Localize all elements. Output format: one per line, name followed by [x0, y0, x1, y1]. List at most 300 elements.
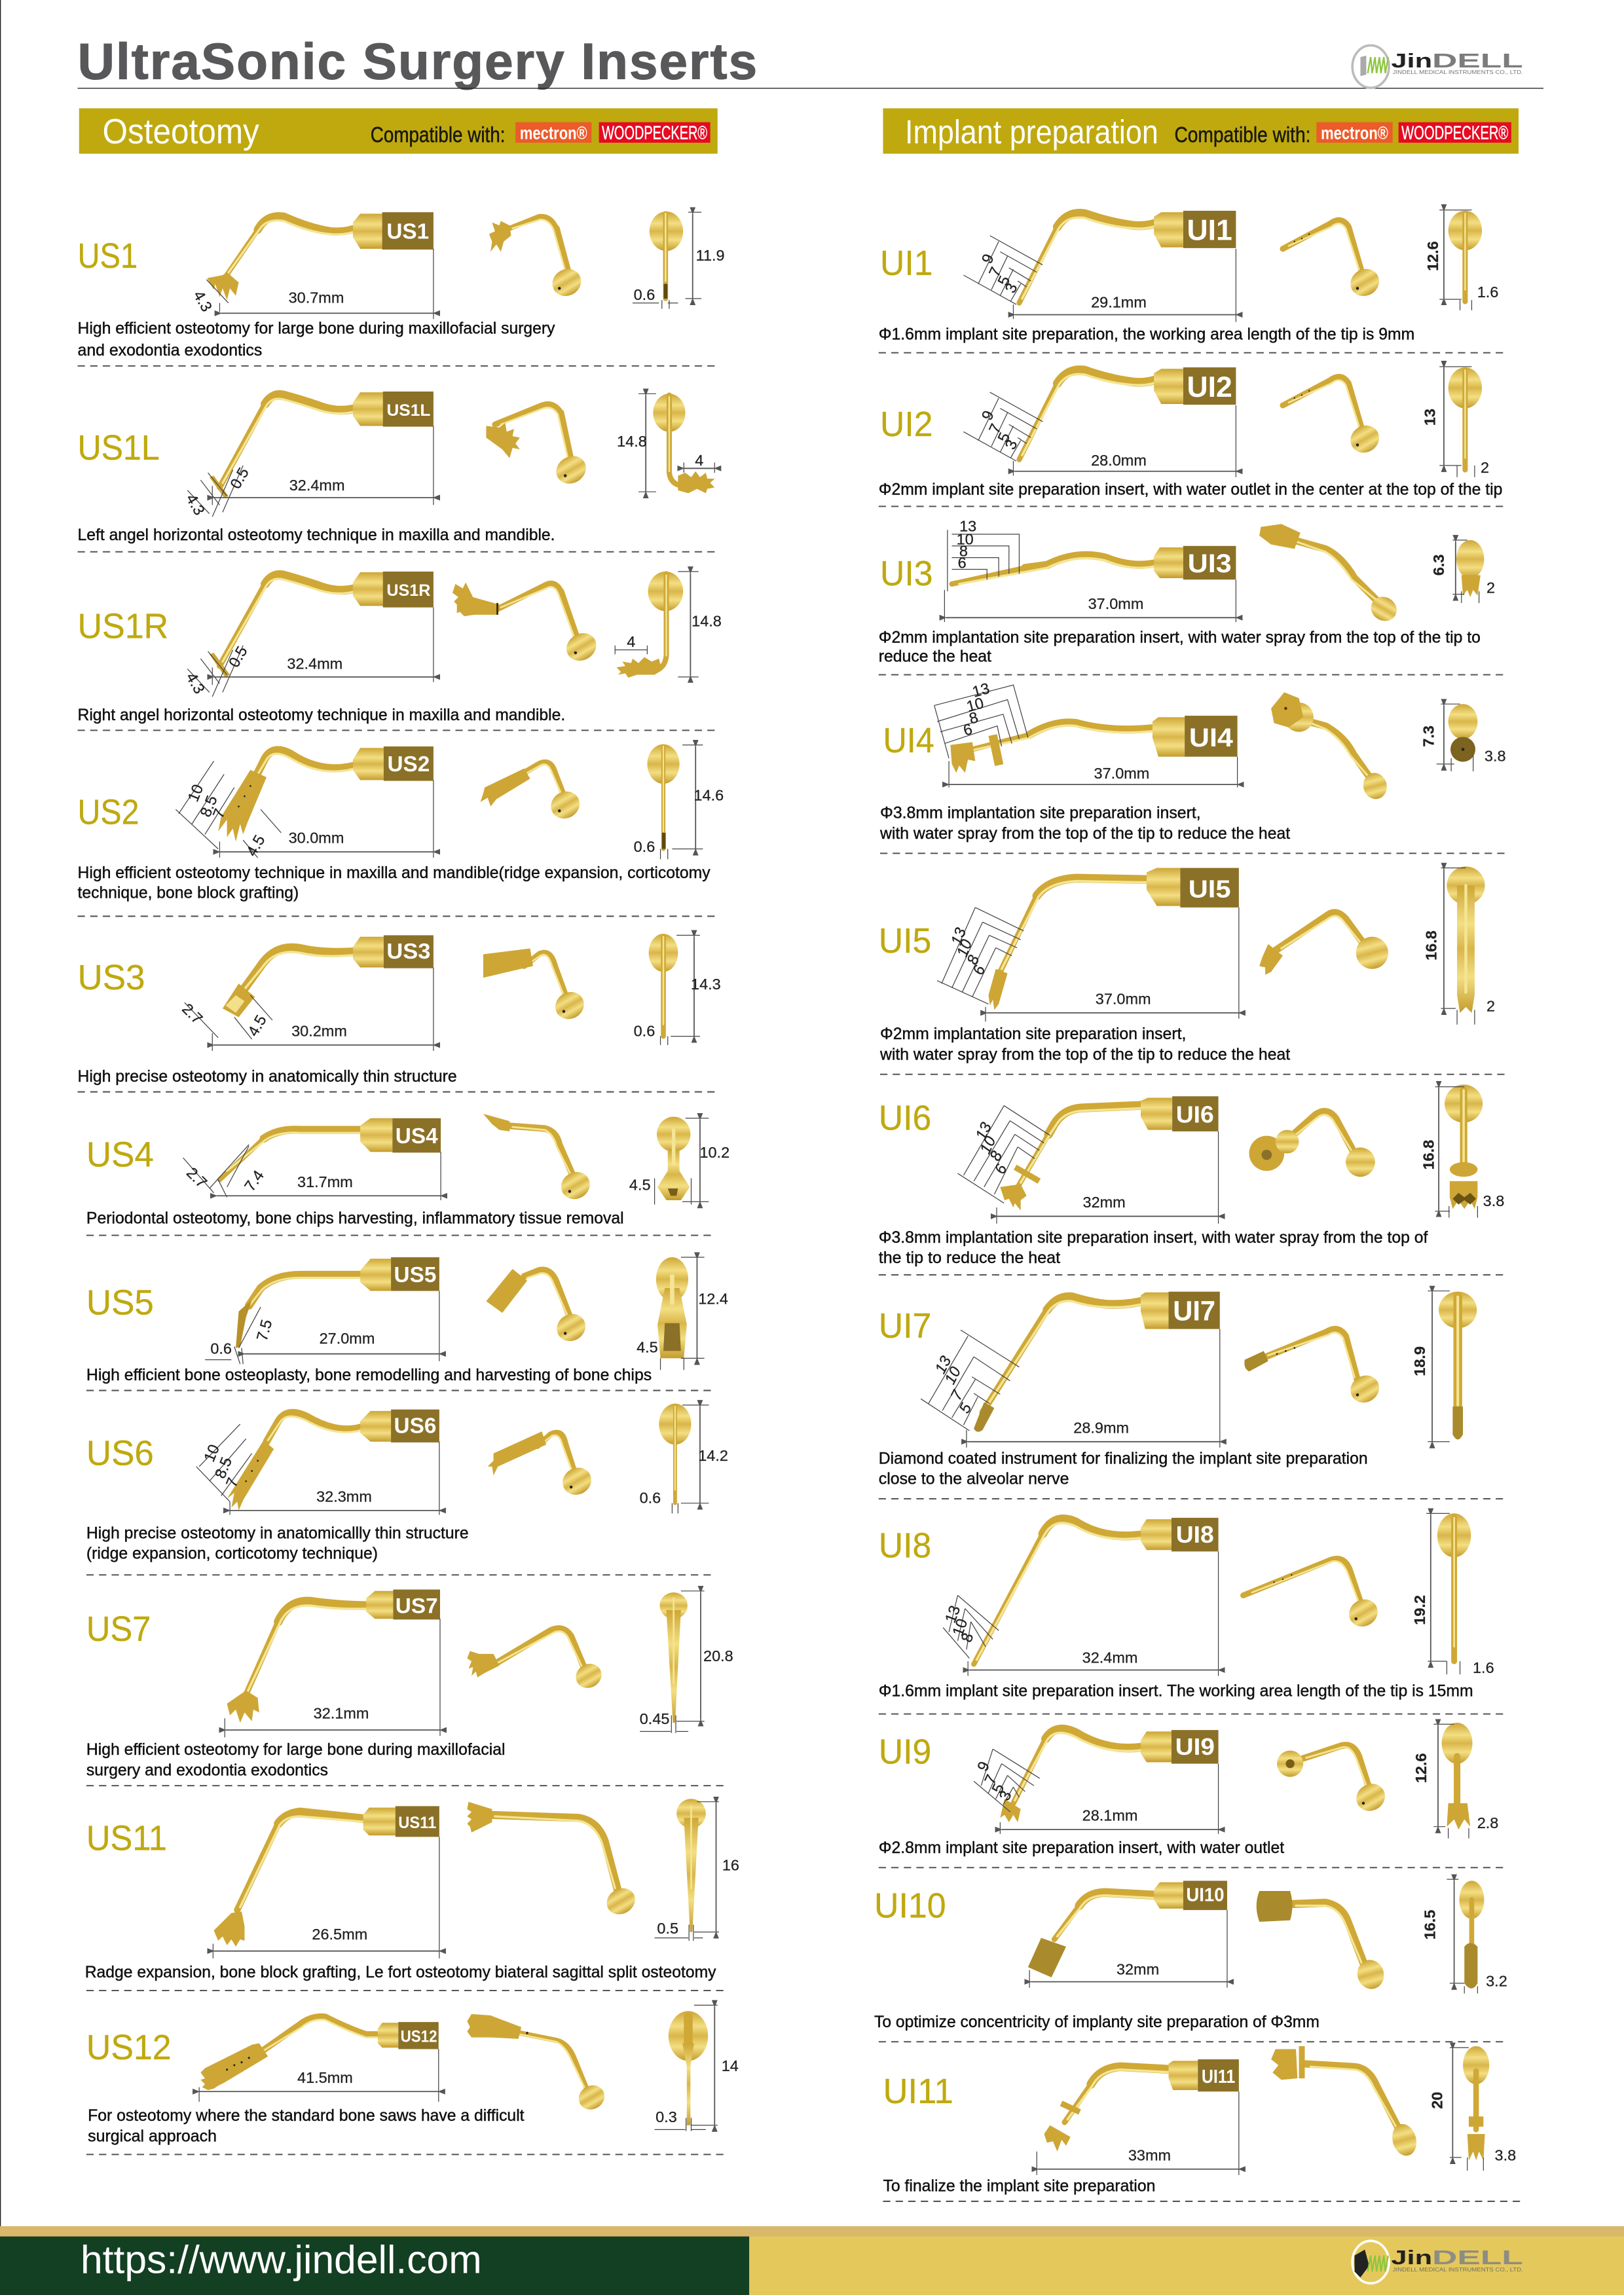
front view: 0.3	[655, 2108, 677, 2125]
dimensions: 8	[967, 708, 980, 727]
description: For osteotomy where the standard bone saws have a difficult	[88, 2107, 525, 2125]
dimensions	[190, 249, 434, 319]
description: the tip to reduce the heat	[879, 1249, 1060, 1267]
front view: 3.8	[1485, 747, 1506, 764]
insert with label	[1028, 1881, 1227, 1977]
front view	[633, 211, 725, 309]
dimensions: 8	[963, 953, 982, 967]
logo: Jindell top: Jin	[1391, 50, 1432, 72]
front view	[634, 744, 724, 859]
dimensions: 32.4mm	[289, 477, 345, 494]
front view: 1.6	[1477, 284, 1498, 301]
insert with label: UI8	[1176, 1522, 1214, 1548]
front view	[634, 934, 721, 1045]
dimensions: 10	[941, 1364, 964, 1387]
dimensions: 13	[948, 925, 969, 947]
name: US1R	[78, 607, 168, 646]
insert with label: US11	[398, 1814, 436, 1832]
header	[78, 33, 1543, 90]
name: US7	[86, 1609, 151, 1649]
entry: UI9	[879, 1723, 1498, 1857]
footer: website panel: https://www.jindell.com	[81, 2237, 482, 2281]
description: Φ2.8mm implant site preparation insert, with water outlet	[879, 1839, 1284, 1857]
dimensions: 10	[976, 1133, 999, 1156]
front view	[1423, 866, 1495, 1025]
dimensions: 28.1mm	[1082, 1807, 1137, 1824]
logo: Jindell footer: Jin	[1391, 2247, 1432, 2269]
insert with label	[974, 1292, 1220, 1432]
front view	[640, 1404, 728, 1513]
description: Right angel horizontal osteotomy technique in maxilla and mandible.	[78, 707, 565, 724]
side view	[467, 1802, 640, 1919]
front view: 18.9	[1411, 1346, 1428, 1376]
insert with label: US2	[387, 752, 430, 777]
name: UI5	[879, 921, 931, 961]
entry: US11	[85, 1799, 739, 1981]
front view: 2	[1486, 579, 1495, 596]
front view: 3.2	[1486, 1972, 1507, 1989]
dimensions: 0.6	[210, 1340, 232, 1357]
dimensions: 7	[223, 1475, 242, 1490]
description: Left angel horizontal osteotomy technique in maxilla and mandible.	[78, 526, 555, 544]
description: Φ2mm implant site preparation insert, with water outlet in the center at the top of the tip	[879, 481, 1502, 499]
description: Φ1.6mm implant site preparation, the working area length of the tip is 9mm	[879, 326, 1414, 344]
front view: 2	[1481, 459, 1489, 476]
description: surgery and exodontia exodontics	[86, 1761, 328, 1779]
insert with label	[1000, 1096, 1219, 1211]
description: surgical approach	[88, 2127, 217, 2145]
dimensions: 32mm	[1083, 1194, 1126, 1211]
insert with label	[218, 746, 434, 841]
section band: Osteotomy: WOODPECKER®	[602, 122, 707, 143]
side view	[483, 948, 589, 1024]
insert with label: US3	[386, 940, 430, 964]
name: US4	[86, 1135, 154, 1175]
dimensions: 4.5	[243, 832, 268, 859]
description: High efficient osteotomy technique in maxilla and mandible(ridge expansion, corticotomy	[78, 864, 710, 882]
front view: 14.2	[698, 1447, 728, 1464]
dimensions: 5	[994, 273, 1013, 288]
insert with label: UI6	[1176, 1102, 1214, 1128]
insert with label: UI3	[1188, 549, 1232, 578]
entry: UI4	[879, 680, 1506, 843]
front view: 0.6	[634, 1023, 655, 1040]
description: technique, bone block grafting)	[78, 884, 299, 902]
dimensions: 3	[1002, 437, 1021, 452]
name: UI11	[883, 2072, 953, 2111]
dimensions: 32.3mm	[316, 1488, 372, 1505]
entry: US2	[78, 744, 724, 902]
front view: 1.6	[1473, 1659, 1494, 1676]
insert with label	[207, 212, 434, 300]
dimensions: 31.7mm	[297, 1173, 353, 1190]
logo: Jindell top: DELL	[1432, 50, 1523, 72]
insert with label: US1R	[386, 582, 431, 600]
front view	[1420, 1084, 1504, 1218]
dimensions	[937, 908, 1239, 1021]
front view: 14.6	[693, 787, 724, 804]
name: UI8	[879, 1526, 931, 1565]
insert with label: UI2	[1187, 371, 1232, 403]
description: Φ2mm implantation site preparation insert,	[880, 1025, 1186, 1043]
dimensions: 32mm	[1116, 1960, 1159, 1977]
front view: 12.4	[698, 1291, 728, 1308]
front view: 4	[695, 452, 703, 469]
front view: 14.8	[617, 433, 647, 450]
insert with label	[227, 1410, 439, 1511]
entry: UI8	[879, 1513, 1494, 1700]
side view	[1259, 913, 1392, 975]
front view: 12.6	[1412, 1753, 1430, 1783]
description: High efficient osteotomy for large bone during maxillofacial	[86, 1741, 506, 1759]
description: reduce the heat	[879, 648, 991, 665]
front view: 2	[1486, 998, 1495, 1015]
insert with label	[1019, 211, 1236, 303]
insert with label	[950, 716, 1238, 773]
side view	[1259, 524, 1401, 625]
dimensions: 10	[957, 531, 974, 548]
dimensions: 8	[959, 542, 968, 559]
front view: 16	[722, 1857, 739, 1874]
entry: UI3	[879, 517, 1495, 665]
front view: 14.3	[691, 976, 721, 993]
front view: 16.8	[1423, 930, 1440, 961]
description: High precise osteotomy in anatomically thin structure	[78, 1068, 457, 1086]
dimensions: 37.0mm	[1096, 990, 1151, 1007]
entry: US5	[86, 1257, 728, 1384]
section band: Implant preparation: Compatible with:	[1174, 123, 1310, 147]
dimensions	[944, 517, 1236, 622]
logo: Jindell footer	[1352, 2241, 1523, 2283]
insert with label: US12	[401, 2028, 437, 2046]
dimensions: 6	[969, 963, 989, 977]
front view	[1411, 1513, 1494, 1676]
dimensions: 10	[949, 1617, 970, 1638]
section band: Osteotomy	[79, 108, 718, 154]
insert with label	[200, 2017, 439, 2090]
front view: 16.8	[1420, 1140, 1437, 1170]
front view: 20	[1429, 2092, 1446, 2109]
section band: Implant preparation: Implant preparation	[905, 113, 1158, 151]
insert with label	[227, 1590, 440, 1723]
name: US2	[78, 793, 139, 832]
dimensions	[963, 236, 1236, 322]
front view	[1422, 1879, 1507, 1994]
description: and exodontia exodontics	[78, 342, 262, 359]
dimensions	[213, 1837, 439, 1958]
dimensions: 28.0mm	[1091, 452, 1147, 469]
dimensions	[225, 1619, 440, 1737]
dimensions: 0.5	[227, 465, 252, 492]
side view	[467, 1628, 606, 1693]
dimensions: 37.0mm	[1088, 595, 1143, 612]
entry: US4	[86, 1114, 729, 1228]
dimensions: 6	[991, 1161, 1010, 1177]
entry: US6	[86, 1404, 728, 1563]
entry: UI10	[874, 1879, 1507, 2031]
front view: 0.6	[640, 1490, 661, 1507]
name: US1L	[78, 428, 160, 468]
front view: 16.5	[1422, 1910, 1439, 1939]
dimensions	[205, 1291, 439, 1364]
dimensions: 2.7	[179, 1000, 206, 1027]
dimensions	[1037, 2091, 1239, 2175]
dimensions: 10	[953, 937, 975, 959]
dimensions: 33mm	[1128, 2146, 1171, 2163]
name: UI7	[879, 1306, 931, 1346]
insert with label	[213, 1806, 439, 1947]
entry: US3	[78, 934, 721, 1086]
dimensions	[199, 2049, 439, 2102]
dimensions: 6	[961, 720, 974, 739]
dimensions	[963, 392, 1236, 477]
dimensions: 13	[970, 680, 991, 701]
insert with label	[952, 546, 1236, 584]
description: High efficient bone osteoplasty, bone remodelling and harvesting of bone chips	[86, 1367, 652, 1384]
side view	[1249, 1112, 1375, 1177]
dimensions: 4.3	[183, 670, 208, 697]
dimensions	[183, 608, 434, 697]
front view: 13	[1422, 409, 1439, 426]
insert with label: UI9	[1175, 1734, 1215, 1760]
description: Periodontal osteotomy, bone chips harvesting, inflammatory tissue removal	[86, 1210, 624, 1228]
dimensions: 7.5	[253, 1317, 275, 1343]
dimensions	[175, 761, 434, 859]
insert with label: UI11	[1202, 2066, 1235, 2087]
entry: US12	[86, 2005, 739, 2145]
name: US11	[86, 1818, 167, 1858]
description: To optimize concentricity of implanty site preparation of Φ3mm	[874, 2013, 1320, 2031]
dimensions: 8.5	[196, 793, 221, 819]
logo: Jindell footer: JINDELL MEDICAL INSTRUMENTS CO., LTD.	[1393, 2267, 1523, 2273]
dimensions: 9	[974, 1759, 993, 1774]
dimensions: 3	[996, 1788, 1015, 1803]
insert with label: US5	[394, 1263, 436, 1287]
entry: UI6	[879, 1084, 1504, 1267]
title: UltraSonic Surgery Inserts	[78, 33, 757, 90]
dimensions: 27.0mm	[320, 1330, 375, 1347]
section band: Implant preparation: WOODPECKER®	[1401, 122, 1508, 143]
front view	[615, 572, 722, 678]
name: UI6	[879, 1099, 931, 1138]
front view: 4.5	[629, 1176, 651, 1193]
description: High efficient osteotomy for large bone during maxillofacial surgery	[78, 320, 555, 338]
dimensions	[921, 1329, 1220, 1448]
front view: 3.8	[1483, 1192, 1504, 1209]
entry: UI7	[879, 1291, 1477, 1488]
side view	[1271, 692, 1390, 801]
side view	[486, 404, 591, 489]
entry: UI11	[883, 2046, 1516, 2195]
name: UI2	[880, 405, 932, 444]
insert with label	[1000, 1729, 1219, 1822]
dimensions: 5	[955, 1400, 975, 1416]
dimensions: 32.4mm	[287, 655, 342, 672]
front view: 7.3	[1420, 725, 1437, 747]
dimensions: 3	[1002, 280, 1021, 295]
dimensions: 5	[988, 1781, 1007, 1795]
section band: Osteotomy: Compatible with:	[371, 123, 506, 147]
insert with label	[988, 868, 1239, 1010]
dimensions: 4.5	[244, 1012, 270, 1039]
dimensions: 30.2mm	[291, 1023, 347, 1040]
front view: 14.8	[692, 613, 722, 630]
front view: 0.6	[634, 838, 655, 855]
name: UI3	[880, 554, 932, 593]
front view	[637, 1257, 728, 1370]
insert with label	[210, 572, 434, 678]
insert with label	[1019, 367, 1236, 460]
description: Diamond coated instrument for finalizing the implant site preparation	[879, 1450, 1368, 1467]
dimensions	[1029, 1910, 1227, 1988]
entry: UI1	[879, 210, 1498, 344]
description: Φ3.8mm implantation site preparation insert, with water spray from the top of	[879, 1229, 1428, 1247]
front view	[655, 1799, 739, 1941]
side view	[489, 217, 586, 301]
side view	[480, 762, 585, 824]
dimensions: 30.7mm	[289, 289, 344, 306]
name: US6	[86, 1434, 154, 1473]
front view: 20.8	[703, 1647, 733, 1664]
insert with label: US6	[394, 1414, 436, 1438]
front view: 11.9	[696, 247, 725, 264]
side view	[486, 1269, 591, 1346]
dimensions: 5	[994, 430, 1013, 445]
description: To finalize the implant site preparation	[883, 2177, 1155, 2195]
insert with label: US4	[396, 1124, 438, 1148]
insert with label	[1044, 2059, 1239, 2152]
side view	[483, 1114, 595, 1204]
side view	[467, 2014, 609, 2114]
dimensions: 29.1mm	[1091, 293, 1147, 310]
insert with label	[223, 935, 434, 1018]
front view: 0.6	[634, 286, 655, 303]
dimensions: 7	[986, 421, 1005, 436]
dimensions: 13	[942, 1603, 963, 1625]
dimensions	[183, 426, 434, 518]
side view	[1257, 1891, 1387, 1992]
insert with label: US7	[396, 1594, 438, 1617]
dimensions: 4.3	[190, 287, 215, 314]
front view: 10.2	[699, 1144, 729, 1161]
dimensions: 10	[200, 1442, 223, 1464]
dimensions	[958, 1106, 1219, 1224]
name: UI4	[883, 721, 934, 760]
side view	[1244, 1329, 1384, 1408]
description: Radge expansion, bone block grafting, Le fort osteotomy biateral sagittal split osteotomy	[85, 1964, 716, 1981]
dimensions: 8.5	[212, 1455, 235, 1481]
front view: 0.45	[640, 1710, 669, 1727]
dimensions	[183, 1145, 441, 1200]
front view	[655, 2005, 739, 2131]
front view	[640, 1591, 733, 1733]
insert with label	[236, 1257, 439, 1348]
front view	[1430, 540, 1495, 603]
front view	[1422, 367, 1489, 477]
description: Φ2mm implantation site preparation insert, with water spray from the top of the tip to	[879, 629, 1481, 646]
side view	[1283, 220, 1384, 301]
name: UI1	[880, 244, 932, 283]
dimensions	[974, 1749, 1219, 1834]
front view: 3.8	[1495, 2146, 1516, 2163]
dimensions: 10	[185, 782, 206, 804]
dimensions: 28.9mm	[1073, 1419, 1129, 1436]
front view	[617, 394, 714, 493]
side view	[452, 583, 601, 666]
dimensions: 7	[986, 265, 1005, 280]
logo: Jindell footer: DELL	[1432, 2247, 1523, 2269]
front view: 2.8	[1477, 1814, 1498, 1831]
dimensions: 26.5mm	[312, 1926, 367, 1943]
insert with label	[219, 1118, 441, 1180]
name: UI9	[879, 1733, 931, 1772]
dimensions: 7	[210, 806, 229, 820]
front view	[1412, 1723, 1498, 1839]
description: (ridge expansion, corticotomy technique)	[86, 1545, 378, 1563]
front view	[1420, 704, 1506, 771]
entry: US1L	[78, 392, 714, 544]
footer: website panel	[0, 2237, 749, 2295]
name: US1	[78, 236, 138, 276]
name: US5	[86, 1283, 154, 1322]
description: with water spray from the top of the tip to reduce the heat	[879, 1046, 1290, 1063]
logo: Jindell top	[1352, 45, 1523, 88]
insert with label: US1L	[386, 402, 430, 420]
section band: Implant preparation	[883, 108, 1519, 154]
front view	[1424, 210, 1498, 310]
description: High precise osteotomy in anatomicallly thin structure	[86, 1524, 469, 1542]
description: with water spray from the top of the tip to reduce the heat	[879, 825, 1290, 843]
dimensions: 32.1mm	[314, 1704, 369, 1721]
dimensions	[196, 1424, 439, 1515]
dimensions: 8	[957, 1630, 976, 1644]
dimensions: 8	[986, 1148, 1005, 1164]
entry: US1	[78, 211, 725, 359]
description: Φ3.8mm implantation site preparation insert,	[880, 805, 1201, 822]
side view	[1271, 2046, 1420, 2158]
dimensions: 13	[931, 1353, 954, 1376]
entry: UI2	[879, 367, 1502, 499]
section band: Osteotomy: mectron®	[520, 122, 587, 143]
insert with label: UI10	[1186, 1885, 1225, 1906]
front view: 4.5	[637, 1338, 658, 1355]
dimensions: 4.3	[183, 491, 208, 518]
front view	[1429, 2046, 1516, 2171]
dimensions: 2.7	[183, 1164, 210, 1191]
insert with label	[974, 1518, 1219, 1664]
name: US3	[78, 958, 145, 997]
name: UI10	[874, 1886, 946, 1925]
entry: UI5	[879, 866, 1495, 1063]
dimensions	[942, 1551, 1219, 1676]
side view	[488, 1431, 597, 1500]
front view: 14	[722, 2057, 739, 2074]
description: Φ1.6mm implant site preparation insert. The working area length of the tip is 15mm	[879, 1683, 1473, 1700]
dimensions: 13	[959, 517, 976, 534]
dimensions: 41.5mm	[297, 2069, 353, 2086]
front view: 0.5	[657, 1920, 678, 1937]
insert with label: UI7	[1173, 1296, 1215, 1327]
logo: Jindell top: JINDELL MEDICAL INSTRUMENTS CO., LTD.	[1393, 69, 1523, 75]
dimensions: 30.0mm	[289, 830, 344, 847]
dimensions: 7	[947, 1387, 967, 1403]
page left border	[0, 0, 1, 2226]
dimensions: 9	[978, 408, 997, 423]
section band: Osteotomy: Osteotomy	[103, 112, 259, 151]
insert with label: UI5	[1189, 875, 1231, 903]
front view: 6.3	[1430, 555, 1447, 576]
insert with label: UI1	[1187, 215, 1232, 247]
